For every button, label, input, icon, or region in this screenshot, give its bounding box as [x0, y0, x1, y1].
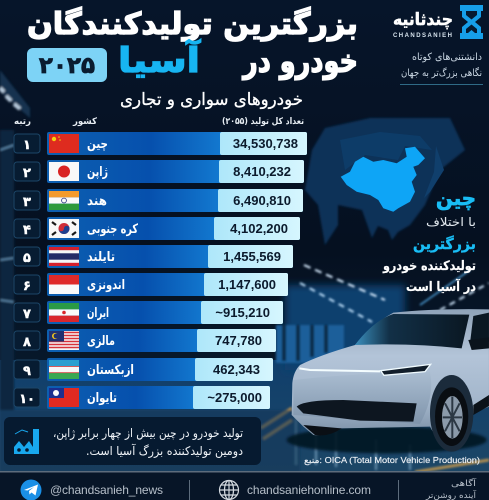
flag: Indonesia	[49, 275, 79, 294]
row 9: Uzbekistan: 462,343	[213, 362, 260, 377]
title line 1: بزرگترین تولیدکنندگان	[27, 6, 358, 42]
row 3: India	[14, 189, 303, 212]
side window	[470, 313, 489, 343]
flag: Thailand	[49, 247, 79, 266]
mirror	[468, 337, 489, 350]
tagline: دانشتنی‌های کوتاه	[412, 52, 482, 63]
row 6: Indonesia: 1,147,600	[218, 277, 276, 292]
title line 2: خودرو در	[241, 42, 358, 80]
row 3: India: 6,490,810	[233, 193, 291, 208]
car shadow	[287, 427, 487, 453]
brand latin: CHANDSANIEH	[393, 33, 452, 39]
subtitle: خودروهای سواری و تجاری	[120, 90, 303, 110]
row 9: Uzbekistan: ازبکستان	[87, 363, 134, 378]
tagline	[401, 52, 482, 79]
row 3: India: ۳	[23, 195, 31, 210]
row 8: Malaysia: ۸	[23, 335, 31, 350]
row 6: Indonesia	[14, 273, 288, 296]
title highlight: آسیا	[118, 39, 202, 81]
row 1: China: چین	[87, 137, 108, 152]
row 6: Indonesia: ۶	[23, 279, 31, 294]
China callout text: بزرگترین	[413, 235, 476, 253]
row 1: China: 34,530,738	[233, 136, 298, 151]
icon: factory chart	[14, 429, 39, 454]
column headers: رتبه	[14, 117, 31, 127]
side sill	[473, 395, 489, 415]
footer	[0, 471, 489, 500]
title	[27, 6, 358, 81]
row 1: China	[14, 132, 307, 155]
source note: منبع: OICA (Total Motor Vehicle Production)	[304, 455, 480, 465]
flag: India	[49, 191, 79, 210]
China callout text: با اختلاف	[426, 215, 476, 229]
footer slogan: آگاهی	[451, 477, 477, 489]
flag: South Korea	[49, 219, 79, 238]
grille	[297, 400, 417, 422]
China callout text: در آسیا است	[406, 278, 476, 295]
row 6: Indonesia: اندونزی	[87, 278, 125, 293]
row 10: Taiwan	[14, 386, 270, 409]
row 2: Japan: 8,410,232	[233, 164, 291, 179]
map of Asia with China highlighted	[305, 118, 465, 245]
row 2: Japan	[14, 160, 304, 183]
column headers: تعداد کل تولید (۲۰۵۵)	[222, 117, 304, 127]
row 10: Taiwan: ~275,000	[207, 390, 262, 405]
row 8: Malaysia: مالزی	[87, 334, 115, 349]
row 10: Taiwan: تایوان	[87, 391, 117, 406]
row 4: South Korea: 4,102,200	[230, 221, 288, 236]
wheel	[435, 387, 468, 446]
website: chandsaniehonline.com	[247, 483, 371, 497]
row 7: Iran: ~915,210	[215, 305, 270, 320]
China callout text	[382, 186, 476, 295]
China highlighted	[341, 147, 425, 212]
China callout text: تولیدکننده خودرو	[382, 259, 476, 274]
row 3: India: هند	[87, 194, 107, 209]
row 5: Thailand: تایلند	[87, 250, 115, 265]
brand name: چندثانیه	[393, 10, 453, 30]
row 9: Uzbekistan	[14, 358, 273, 381]
headlight	[381, 364, 431, 375]
wheel arch	[430, 375, 473, 452]
row 5: Thailand	[14, 245, 293, 268]
row 10: Taiwan: ۱۰	[19, 392, 35, 407]
row 4: South Korea: کره جنوبی	[87, 222, 138, 237]
row 8: Malaysia: 747,780	[215, 333, 262, 348]
row 5: Thailand: ۵	[23, 251, 31, 266]
row 5: Thailand: 1,455,569	[223, 249, 281, 264]
row 7: Iran	[14, 301, 283, 324]
flag: Uzbekistan	[49, 360, 79, 379]
column headers	[14, 117, 304, 127]
flag: Iran	[49, 303, 79, 322]
row 2: Japan: ژاپن	[87, 165, 108, 180]
flag: China	[49, 134, 79, 153]
front face	[293, 372, 431, 424]
row 4: South Korea	[14, 217, 300, 240]
telegram handle: @chandsanieh_news	[50, 483, 163, 497]
icon: globe	[220, 480, 238, 500]
logo	[393, 5, 483, 39]
windshield	[355, 314, 469, 348]
row 7: Iran: ۷	[23, 307, 31, 322]
China callout text: چین	[436, 186, 476, 211]
flag: Japan	[49, 162, 79, 181]
year badge: ۲۰۲۵	[39, 53, 95, 79]
icon: hourglass	[460, 5, 483, 39]
insight callout	[4, 417, 261, 465]
year badge	[27, 48, 107, 82]
row 2: Japan: ۲	[23, 166, 31, 181]
flag: Taiwan	[49, 388, 79, 407]
icon: telegram	[20, 480, 42, 500]
row 7: Iran: ایران	[87, 306, 109, 321]
column headers: کشور	[72, 117, 98, 127]
insight text: تولید خودرو در چین بیش از چهار برابر ژاپن،	[53, 426, 243, 441]
front wheel	[303, 425, 342, 435]
row 1: China: ۱	[23, 138, 31, 153]
row 8: Malaysia	[14, 329, 276, 352]
row 9: Uzbekistan: ۹	[23, 364, 31, 379]
insight callout: دومین تولیدکننده بزرگ آسیا است.	[86, 443, 243, 459]
row 4: South Korea: ۴	[23, 223, 31, 238]
light bar	[299, 368, 380, 371]
car photo	[287, 309, 489, 453]
car body	[292, 309, 489, 443]
flag: Malaysia	[49, 331, 79, 350]
